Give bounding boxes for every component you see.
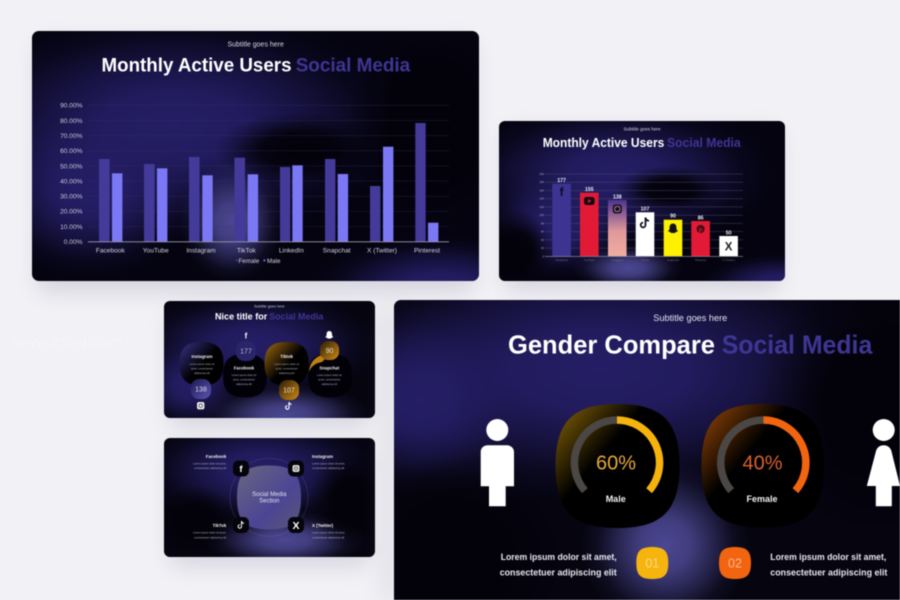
text: facebook — [193, 454, 227, 470]
panel: social media section — [163, 437, 376, 572]
badge: 90 — [320, 341, 339, 360]
title — [215, 312, 324, 322]
x axis labels: Facebook — [96, 248, 125, 254]
y axis labels: 80 — [541, 221, 544, 225]
card: tiktok: adipiscing elit — [279, 371, 295, 375]
icon: facebook: f — [245, 332, 248, 340]
panel: nice title for social media — [163, 300, 376, 432]
y axis labels: 60.00% — [60, 148, 83, 155]
y axis labels: 40 — [541, 238, 544, 242]
x axis labels: YouTube — [584, 258, 595, 262]
badge: 138 — [191, 379, 211, 399]
y axis labels: 40.00% — [60, 178, 83, 185]
card: facebook: amet, consectetuer — [233, 378, 255, 382]
card: instagram: Lorem ipsum dolor sit — [190, 362, 215, 366]
value labels — [557, 178, 732, 236]
bar chart — [539, 172, 743, 262]
icon: facebook — [233, 460, 249, 476]
gauge value — [763, 420, 806, 491]
gauge track — [721, 420, 763, 491]
watermark: www.25xq.com — [12, 334, 122, 349]
y axis labels: 30.00% — [60, 194, 83, 201]
icon: tiktok — [286, 402, 292, 409]
text: tiktok: Lorem ipsum dolor sit amet, — [193, 531, 227, 535]
value labels: 107 — [641, 207, 649, 213]
y axis labels — [60, 103, 83, 246]
text: x twitter: X (Twitter) — [312, 523, 334, 528]
badge: 177: 177 — [240, 348, 252, 356]
card: instagram: Instagram — [192, 354, 213, 359]
icon: facebook: f — [560, 185, 565, 199]
value labels: 50 — [726, 230, 732, 236]
y axis labels: 20 — [541, 246, 544, 250]
gauge card: male — [556, 404, 680, 528]
y axis labels: 70.00% — [60, 133, 83, 140]
ring — [230, 458, 308, 536]
y axis labels: 100 — [539, 213, 544, 217]
x axis labels: LinkedIn — [279, 248, 304, 254]
x axis labels: YouTube — [143, 248, 169, 254]
icon: x: X — [292, 520, 300, 532]
text: facebook: Facebook — [206, 454, 227, 459]
card: facebook: Facebook — [234, 366, 255, 370]
card: tiktok: amet, consectetuer — [276, 367, 298, 371]
icon: x: X — [725, 242, 733, 254]
subtitle: Subtitle goes here — [227, 42, 284, 48]
icon: snapchat — [325, 331, 334, 339]
badge: 138: 138 — [195, 386, 207, 394]
title: Social Media — [722, 330, 873, 360]
card: instagram — [180, 342, 224, 386]
title: Social Media — [269, 312, 324, 322]
subtitle: Subtitle goes here — [653, 313, 727, 324]
x axis labels: TikTok — [641, 258, 650, 262]
x axis labels — [555, 258, 735, 262]
card: facebook: adipiscing elit — [236, 382, 252, 386]
female bars — [99, 123, 426, 242]
legend — [236, 258, 281, 265]
y axis labels: 200 — [539, 172, 544, 176]
text: instagram: consectetuer adipiscing elit — [312, 466, 345, 470]
card: facebook: Lorem ipsum dolor sit — [232, 373, 257, 377]
value labels: 90 — [670, 214, 676, 220]
x axis labels: X (Twitter) — [722, 258, 735, 262]
title: Monthly Active Users — [543, 136, 664, 150]
title: Nice title for — [215, 312, 268, 322]
text: instagram: Lorem ipsum dolor sit amet, — [312, 461, 345, 465]
badge: 177 — [236, 341, 256, 361]
panel: monthly users by platform — [498, 120, 786, 297]
value labels: 177 — [557, 178, 566, 184]
icon: x — [288, 517, 304, 533]
card: snapchat: adipiscing elit — [322, 382, 337, 386]
title — [102, 56, 411, 77]
panel: gender compare — [384, 300, 900, 600]
x axis labels: Snapchat — [667, 258, 679, 262]
text: x twitter: Lorem ipsum dolor sit amet, — [312, 531, 345, 535]
icon: tiktok — [233, 517, 249, 533]
x axis labels: Instagram — [186, 248, 216, 254]
text: female note: consectetuer adipiscing elit — [770, 568, 888, 578]
text: male note: Lorem ipsum dolor sit amet, — [501, 552, 617, 563]
icon: facebook: f — [239, 464, 243, 475]
card: tiktok: Tiktok — [280, 354, 294, 359]
text: facebook: consectetuer adipiscing elit — [194, 466, 227, 470]
x axis labels: Snapchat — [323, 248, 351, 254]
panel: monthly active users bar chart — [31, 30, 480, 299]
center glass card: Social Media — [252, 492, 287, 498]
y axis labels: 80.00% — [60, 118, 83, 125]
x axis labels: Facebook — [555, 258, 568, 262]
title: Gender Compare — [508, 330, 715, 360]
card: snapchat: Lorem ipsum dolor sit — [317, 373, 342, 377]
icon: pinterest: p — [699, 226, 703, 233]
value labels: 86 — [698, 215, 704, 221]
bar chart — [60, 103, 449, 265]
icon: male figure — [481, 419, 514, 506]
badge: 01: 01 — [645, 556, 659, 570]
x axis labels: TikTok — [237, 248, 256, 254]
badge: 107: 107 — [283, 388, 295, 394]
title — [508, 330, 873, 360]
icon: instagram — [288, 460, 304, 476]
icon: female figure — [867, 419, 900, 506]
value labels: 155 — [585, 187, 594, 193]
y axis labels: 60 — [541, 230, 544, 234]
legend: Female — [238, 258, 260, 265]
card: snapchat — [308, 354, 352, 398]
text: male note — [500, 552, 617, 578]
card: tiktok: Lorem ipsum dolor sit — [274, 362, 299, 366]
label: Male — [606, 494, 626, 504]
icon: snapchat — [668, 224, 678, 233]
value: 40% — [742, 452, 783, 474]
card: snapchat: amet, consectetuer — [318, 378, 340, 382]
text: male note: consectetuer adipiscing elit — [500, 568, 617, 578]
bars — [552, 184, 738, 256]
y axis labels: 50.00% — [60, 163, 83, 170]
y axis labels: 0 — [542, 254, 544, 258]
x axis labels: Pinterest — [414, 248, 440, 254]
text: instagram — [312, 454, 345, 470]
card: instagram: adipiscing elit — [194, 371, 210, 375]
value: 60% — [596, 452, 636, 474]
icon: pinterest — [697, 225, 705, 233]
center glass card: Section — [259, 499, 279, 505]
icon: instagram — [197, 402, 204, 409]
title: Social Media — [667, 136, 742, 150]
badge: 01 — [636, 547, 668, 579]
text: tiktok: consectetuer adipiscing elit — [194, 535, 227, 539]
x axis labels: Instagram — [611, 258, 624, 262]
x axis labels: X (Twitter) — [367, 248, 397, 254]
badge: 02: 02 — [728, 556, 742, 570]
text: x twitter — [312, 523, 345, 539]
card: instagram: amet, consectetuer — [191, 367, 213, 371]
icon: tiktok — [641, 218, 649, 227]
badge: 107 — [279, 380, 299, 400]
title: Monthly Active Users — [102, 56, 292, 77]
icon: youtube — [584, 197, 595, 205]
gauge card: female — [702, 404, 824, 528]
text: x twitter: consectetuer adipiscing elit — [312, 535, 345, 539]
badge: 02 — [719, 547, 751, 579]
text: tiktok — [193, 523, 227, 539]
male bars — [112, 147, 438, 242]
badge: 90: 90 — [326, 348, 333, 355]
y axis labels: 160 — [539, 188, 544, 192]
subtitle: Subtitle goes here — [254, 305, 285, 309]
y axis labels: 10.00% — [60, 224, 83, 231]
y axis labels: 20.00% — [60, 209, 83, 216]
gauge track — [574, 420, 617, 491]
card: tiktok — [264, 342, 308, 386]
text: instagram: Instagram — [312, 454, 333, 459]
subtitle: Subtitle goes here — [623, 126, 661, 132]
text: female note: Lorem ipsum dolor sit amet, — [770, 552, 886, 563]
y axis labels: 0.00% — [64, 239, 83, 246]
card: facebook — [223, 354, 267, 398]
y axis labels: 180 — [539, 180, 544, 184]
text: female note — [770, 552, 888, 578]
legend: Male — [267, 258, 281, 265]
y axis labels: 140 — [539, 197, 544, 201]
x axis labels — [96, 248, 440, 254]
text: tiktok: TikTok — [213, 523, 227, 528]
x axis labels: Pinterest — [695, 258, 706, 262]
title: Social Media — [296, 56, 411, 77]
y axis labels — [539, 172, 544, 258]
card: snapchat: Snapchat — [319, 366, 340, 370]
title — [543, 136, 742, 150]
label: Female — [746, 494, 778, 504]
y axis labels: 120 — [539, 205, 544, 209]
value labels: 138 — [613, 194, 622, 200]
text: facebook: Lorem ipsum dolor sit amet, — [193, 461, 227, 465]
gauge value — [617, 420, 660, 491]
y axis labels: 90.00% — [60, 103, 83, 110]
center glass card — [237, 466, 301, 530]
icon: instagram — [613, 204, 622, 214]
